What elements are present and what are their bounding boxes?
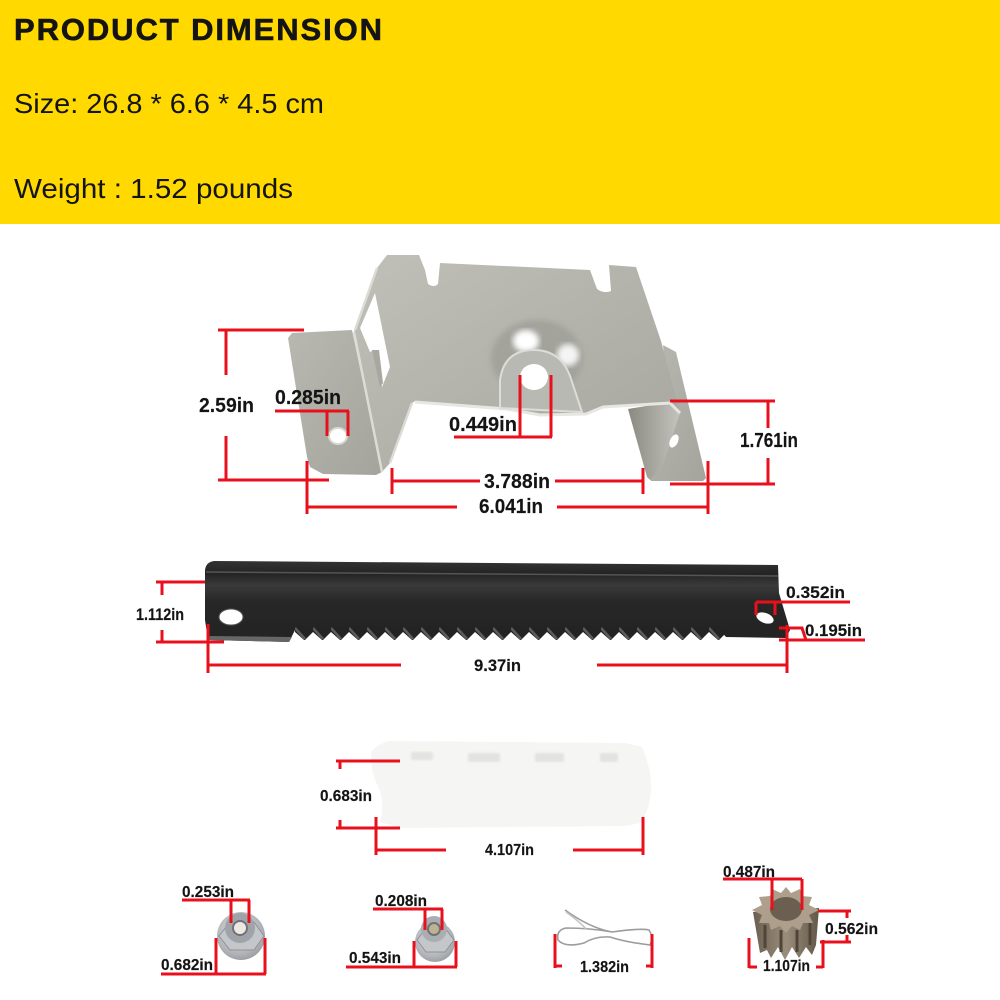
small flange nut [415, 916, 455, 962]
dimension 0.449in: 0.449in [449, 414, 517, 436]
dimension 2.59in: 2.59in [199, 395, 254, 417]
dimension 4.107in [376, 817, 643, 859]
bottom bend highlight [415, 402, 680, 415]
rack right hole [755, 610, 775, 626]
dimension 0.285in: 0.285in [275, 387, 341, 409]
dimension 0.352in: 0.352in [786, 583, 845, 602]
embossed dome [491, 320, 583, 396]
large nut dimensions [161, 884, 266, 974]
cylinder slots [411, 752, 618, 762]
dimension 6.041in: 6.041in [479, 496, 543, 518]
bracket dimensions [199, 330, 798, 518]
gear grooves [765, 922, 810, 952]
dimension 1.112in: 1.112in [136, 605, 184, 624]
hairpin clip [558, 910, 652, 945]
left flange hole [329, 428, 347, 444]
black toothed rack [205, 561, 790, 642]
dimension 1.107in [749, 938, 823, 975]
clip dimension 1.382in [555, 934, 652, 976]
dimension 0.285in [275, 387, 349, 436]
dimension 0.195in: 0.195in [805, 621, 862, 640]
dimension 0.683in: 0.683in [320, 788, 372, 805]
dimension 3.788in [392, 468, 643, 494]
rack top chamfer line [206, 572, 778, 576]
dimension 0.562in [818, 911, 878, 942]
rack left hole [219, 609, 243, 625]
dimension 0.352in [756, 583, 850, 615]
dimension 0.683in [320, 761, 400, 828]
left flange [288, 330, 382, 475]
gear dimensions [723, 864, 878, 975]
rack dimensions [136, 582, 865, 675]
dimension 0.208in: 0.208in [375, 893, 427, 910]
dimension 6.041in [307, 461, 708, 518]
window tab [372, 350, 383, 387]
dimension 0.487in: 0.487in [723, 864, 775, 881]
dimension 1.107in: 1.107in [763, 958, 810, 975]
title: PRODUCT DIMENSION [14, 12, 382, 47]
dimension 1.112in [136, 582, 224, 642]
size text: Size: 26.8 * 6.6 * 4.5 cm [14, 88, 324, 119]
weight text: Weight : 1.52 pounds [14, 173, 293, 204]
dimension 4.107in: 4.107in [485, 842, 534, 859]
dimension 1.761in [670, 401, 798, 484]
dimension 9.37in [208, 624, 787, 675]
rack teeth [295, 627, 727, 641]
centre hole [520, 364, 548, 390]
window in wall [360, 293, 390, 387]
right flange [649, 345, 706, 481]
dimension 2.59in [199, 330, 329, 480]
dimension 9.37in: 9.37in [474, 656, 521, 675]
large flange nut [217, 912, 265, 960]
dimension 0.195in [779, 621, 865, 640]
clip dimension 1.382in: 1.382in [580, 959, 629, 976]
dimension 0.682in: 0.682in [161, 957, 213, 974]
white plastic cylinder [371, 741, 651, 828]
dimension 0.487in [723, 864, 802, 910]
left wall and main plate [354, 255, 680, 472]
header banner [0, 0, 1000, 224]
cylinder dimensions [320, 761, 643, 859]
dimension 1.761in: 1.761in [740, 430, 798, 452]
metal bracket [288, 255, 706, 481]
gear bore [770, 897, 802, 921]
dimension 0.543in: 0.543in [349, 950, 401, 967]
dimension 3.788in: 3.788in [484, 471, 550, 493]
small nut dimensions [346, 893, 457, 967]
rack bottom-left chamfer [208, 636, 292, 642]
wall fold highlight [354, 268, 412, 472]
pinion gear [752, 887, 819, 960]
dimension 0.562in: 0.562in [825, 921, 878, 938]
dimension 0.253in: 0.253in [182, 884, 234, 901]
dimension 0.449in [449, 375, 552, 437]
